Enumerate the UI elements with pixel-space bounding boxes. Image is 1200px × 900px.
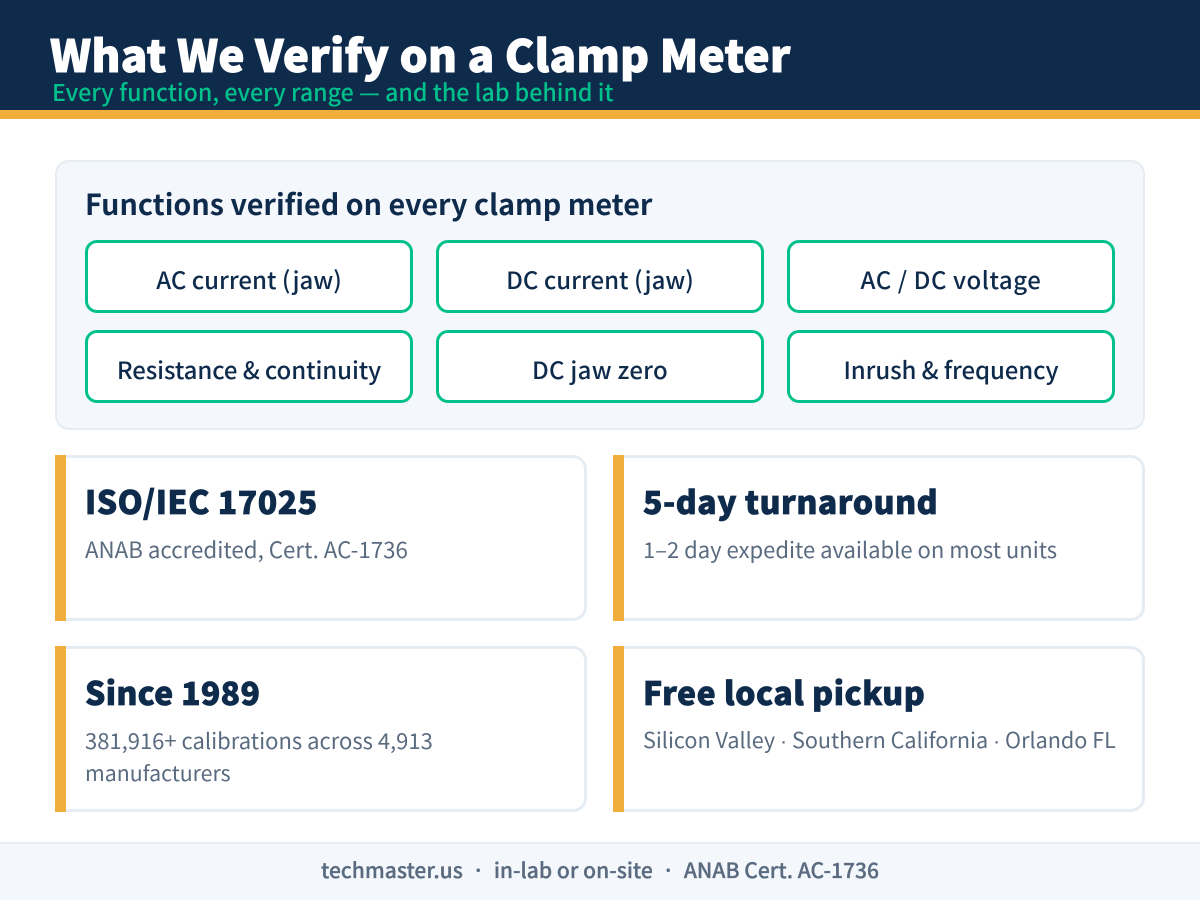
card: Since 1989 — [55, 646, 587, 812]
subtitle: Every function, every range — and the lab behind it — [52, 74, 614, 108]
chip: inrush — [787, 330, 1115, 403]
header band — [0, 0, 1200, 119]
chip: DC current: DC current (jaw) — [506, 260, 694, 296]
card: Since 1989: Since 1989 — [85, 669, 260, 715]
card: Since 1989: 381,916+ calibrations across 4,913 manufacturers — [85, 724, 433, 788]
chip: DC jaw zero — [436, 330, 764, 403]
card: Free local pickup: Free local pickup — [643, 669, 925, 715]
card: Free local pickup: Silicon Valley · Southern California · Orlando FL — [643, 724, 1116, 755]
footer: techmaster.us · in-lab or on-site · ANAB Cert. AC-1736 — [321, 855, 879, 885]
card: 5-day turnaround: 1–2 day expedite available on most units — [643, 533, 1057, 565]
panel heading: Functions verified on every clamp meter — [85, 183, 652, 224]
card: ISO/IEC 17025 — [55, 455, 587, 621]
chip: resistance — [85, 330, 413, 403]
footer — [0, 842, 1200, 900]
chip: voltage: AC / DC voltage — [861, 260, 1041, 296]
chip: DC current — [436, 240, 764, 313]
card: Free local pickup — [613, 646, 1145, 812]
chip: voltage — [787, 240, 1115, 313]
chip: resistance: Resistance & continuity — [117, 350, 381, 386]
chip: AC current — [85, 240, 413, 313]
chip: DC jaw zero: DC jaw zero — [532, 350, 668, 386]
chip: AC current: AC current (jaw) — [156, 260, 342, 296]
card: ISO/IEC 17025: ANAB accredited, Cert. AC-1736 — [85, 533, 408, 565]
panel: functions verified — [55, 160, 1145, 430]
title: What We Verify on a Clamp Meter — [50, 21, 791, 85]
card: 5-day turnaround: 5-day turnaround — [643, 478, 938, 524]
card: ISO/IEC 17025: ISO/IEC 17025 — [85, 478, 318, 524]
card: 5-day turnaround — [613, 455, 1145, 621]
chip: inrush: Inrush & frequency — [843, 350, 1059, 386]
